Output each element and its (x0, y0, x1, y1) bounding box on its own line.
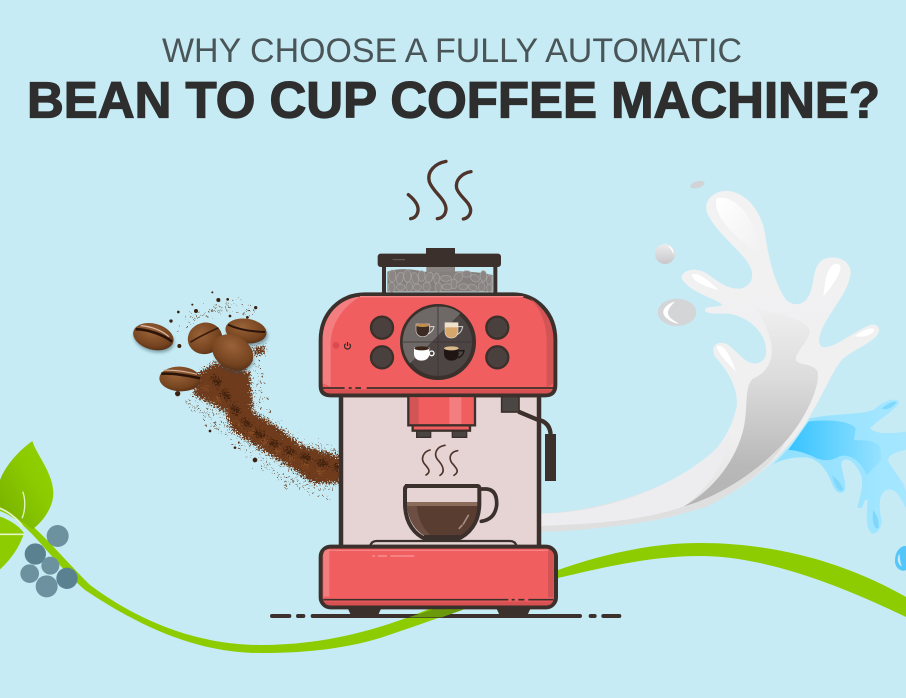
milk lower highlight (540, 433, 731, 526)
green vine (0, 506, 906, 653)
steam wand (502, 397, 551, 436)
milk finger highlights (692, 198, 874, 372)
milk splash (540, 180, 879, 532)
steam above machine (408, 161, 471, 219)
base feet (347, 607, 531, 615)
milk inner shadow (683, 308, 818, 507)
milk droplets (655, 180, 705, 326)
bean 5 (159, 366, 201, 392)
buttons (371, 317, 508, 368)
coffee machine (272, 161, 619, 617)
bean 3 (224, 316, 268, 346)
red base (321, 547, 556, 607)
display with coffee choices (402, 306, 474, 378)
machine body back panel (341, 395, 539, 552)
blue water splash (773, 400, 906, 571)
ground line (272, 610, 619, 622)
bean hopper (378, 248, 501, 297)
drip tray (370, 541, 517, 546)
leaf 1 (0, 441, 53, 529)
machine top section (321, 248, 555, 395)
cup: dark cup (444, 346, 464, 361)
water drop (895, 546, 906, 571)
cup: white cup (414, 346, 434, 361)
cup: latte glass (445, 323, 463, 338)
power indicator (333, 342, 339, 349)
bean 1 (130, 319, 177, 355)
coffee cup (405, 486, 497, 541)
hopper beans (388, 270, 492, 292)
bean 2 (184, 319, 226, 358)
icon: power symbol (344, 342, 350, 349)
bean 4 (206, 327, 260, 378)
hopper lid (378, 248, 501, 267)
red top housing (321, 294, 555, 395)
title (27, 32, 880, 128)
coffee beans and ground coffee (130, 291, 342, 498)
bean shadows (131, 319, 269, 380)
cup: espresso glass (416, 324, 434, 337)
leaf 2 (0, 517, 24, 569)
vine shadow on ground line (408, 609, 464, 617)
title line 2: BEAN TO CUP COFFEE MACHINE? (27, 72, 880, 128)
small steam above cup (423, 445, 458, 475)
title line 1: WHY CHOOSE A FULLY AUTOMATIC (162, 32, 742, 70)
brew head (408, 396, 475, 437)
green leaves and berries (0, 441, 78, 597)
ground coffee stream (193, 362, 342, 483)
scattered grounds (177, 302, 338, 498)
berries (20, 525, 78, 597)
machine base (272, 541, 619, 617)
